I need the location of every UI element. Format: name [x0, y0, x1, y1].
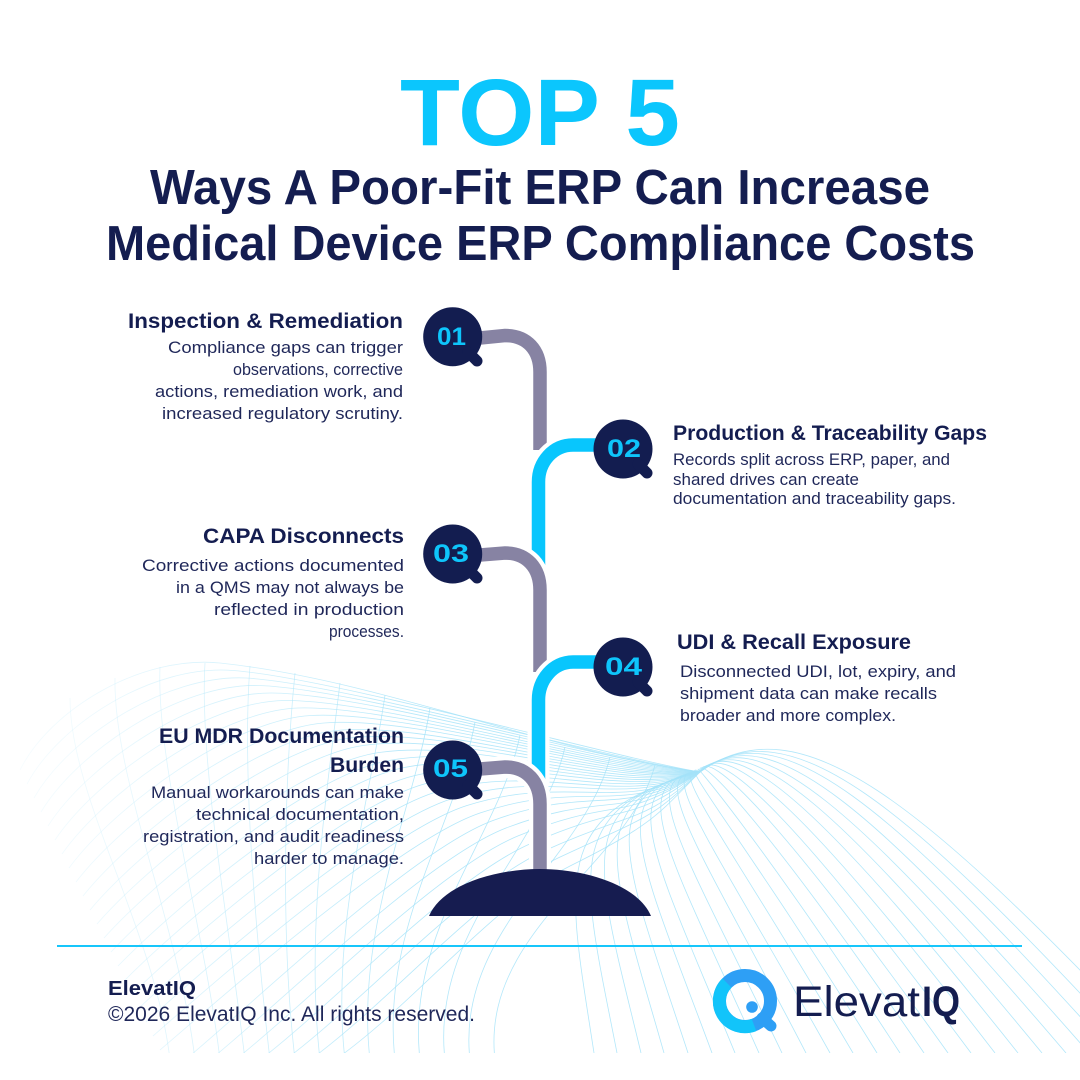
- logo wordmark: Elevat: [793, 978, 920, 1026]
- title: [106, 60, 975, 271]
- text block: item 2: Production & Traceability Gaps: [673, 422, 987, 445]
- text block: item 1: [128, 310, 403, 423]
- icon: marker 04: [594, 638, 652, 696]
- icon: ElevatIQ logo: [719, 976, 960, 1027]
- text block: item 5: EU MDR Documentation: [159, 725, 404, 748]
- text block: item 1: actions, remediation work, and: [155, 382, 403, 401]
- icon: marker 05: [423, 740, 482, 800]
- icon: marker 05: 05: [433, 755, 468, 783]
- text block: item 1: observations, corrective: [233, 360, 403, 379]
- text block: item 5: Manual workarounds can make: [151, 783, 404, 802]
- text block: item 3: CAPA Disconnects: [203, 525, 404, 548]
- icon: marker 02: 02: [607, 435, 641, 463]
- text block: item 4: shipment data can make recalls: [680, 684, 937, 703]
- background wave pattern: [20, 662, 1080, 1060]
- text block: item 2: documentation and traceability gaps.: [673, 489, 956, 508]
- text block: item 3: [142, 525, 404, 641]
- text block: item 5: registration, and audit readiness: [143, 827, 404, 846]
- text block: item 5: [143, 725, 404, 868]
- text block: item 2: Records split across ERP, paper, and: [673, 450, 950, 469]
- icon: marker 03: [423, 524, 482, 584]
- icon: marker 02: [594, 420, 652, 478]
- text block: item 4: UDI & Recall Exposure: [677, 631, 911, 654]
- text block: item 3: Corrective actions documented: [142, 556, 404, 575]
- text block: item 3: reflected in production: [214, 600, 404, 619]
- icon: marker 01: [423, 307, 482, 366]
- heading: top 5: TOP 5: [400, 60, 680, 166]
- heading: subtitle: [106, 161, 975, 271]
- chart: plant base: [429, 869, 651, 916]
- text block: item 2: shared drives can create: [673, 470, 859, 489]
- heading: subtitle: Medical Device ERP Compliance Costs: [106, 217, 975, 271]
- footer text: ElevatIQ: [108, 978, 196, 1000]
- text block: item 1: Inspection & Remediation: [128, 310, 403, 333]
- footer divider line: [57, 945, 1022, 947]
- text block: item 4: broader and more complex.: [680, 706, 896, 725]
- icon: marker 03: 03: [433, 540, 469, 568]
- text block: item 1: Compliance gaps can trigger: [168, 338, 403, 357]
- icon: marker 01: 01: [437, 323, 466, 351]
- logo wordmark: IQ: [922, 978, 960, 1026]
- icon: marker 04: 04: [605, 653, 642, 681]
- text block: item 3: processes.: [329, 622, 404, 641]
- text block: item 5: technical documentation,: [196, 805, 404, 824]
- footer text: ©2026 ElevatIQ Inc. All rights reserved.: [108, 1003, 475, 1026]
- footer text: [108, 978, 475, 1026]
- text block: item 3: in a QMS may not always be: [176, 578, 404, 597]
- text block: item 5: Burden: [330, 754, 404, 777]
- text block: item 1: increased regulatory scrutiny.: [162, 404, 403, 423]
- text block: item 4: [677, 631, 956, 725]
- chart: plant stem: [480, 336, 596, 875]
- text block: item 4: Disconnected UDI, lot, expiry, and: [680, 662, 956, 681]
- text block: item 5: harder to manage.: [254, 849, 404, 868]
- heading: subtitle: Ways A Poor-Fit ERP Can Increase: [150, 161, 930, 215]
- text block: item 2: [673, 422, 987, 508]
